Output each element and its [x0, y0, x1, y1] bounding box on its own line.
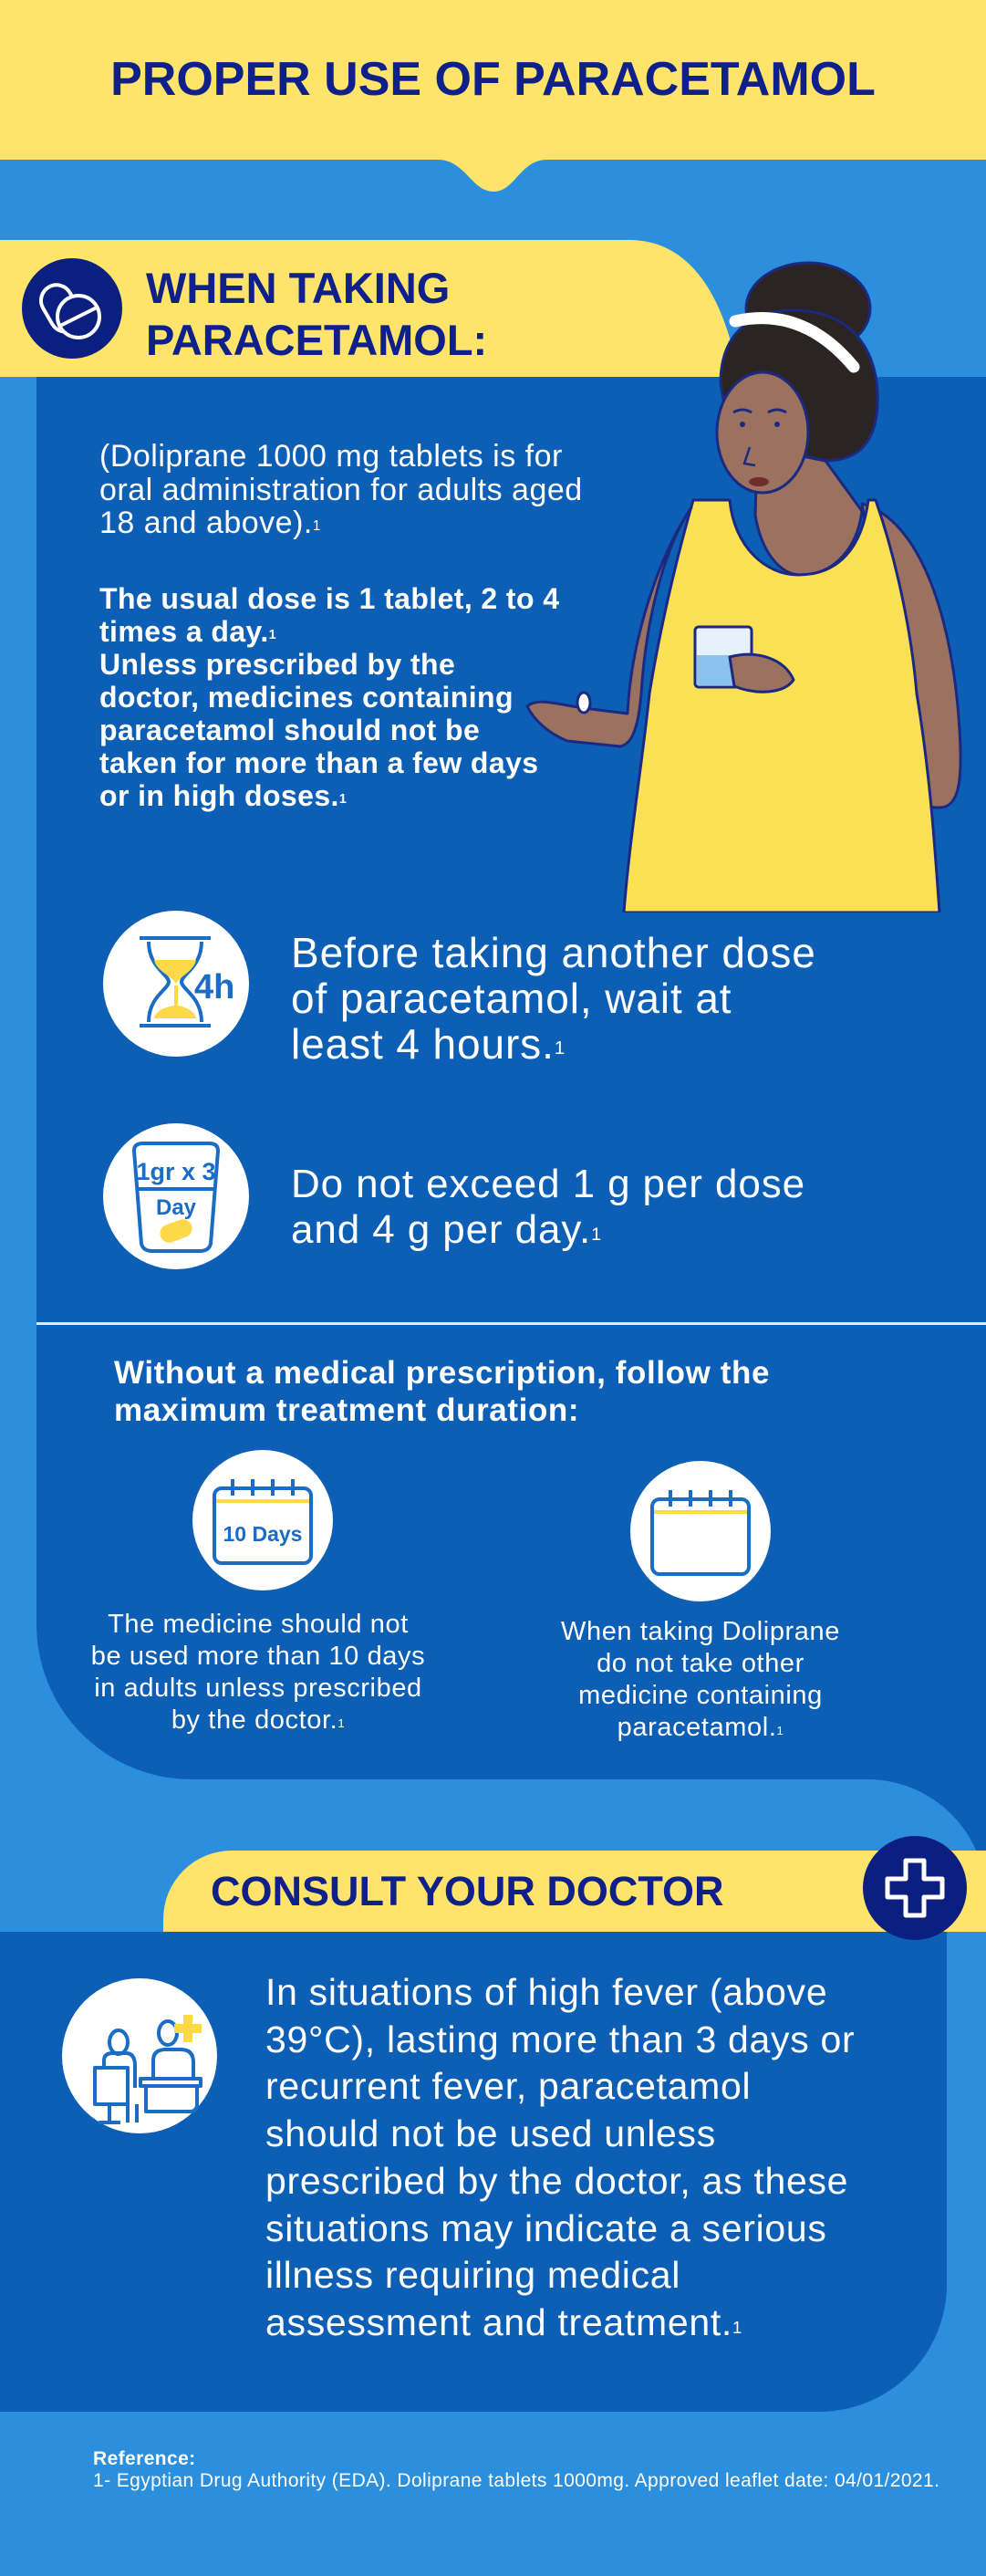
panel: yellow header band consult: [163, 1851, 986, 1932]
text block: do not exceed: [291, 1162, 805, 1252]
text block: usual dose: [99, 582, 559, 812]
icon: empty calendar: [630, 1461, 771, 1601]
text block: usual dose: doctor, medicines containing: [99, 681, 514, 714]
text block: consult body: situations may indicate a serious: [265, 2207, 827, 2249]
icon: doctor consultation: [62, 1978, 217, 2133]
icon: hourglass 4h: 4h: [194, 968, 234, 1006]
text block: 10 days limit: The medicine should not: [108, 1610, 409, 1639]
text block: 10 days limit: in adults unless prescribed: [94, 1674, 422, 1703]
illustration: woman with glass and pill: [525, 261, 962, 913]
icon: calendar 10 days: [192, 1450, 333, 1590]
text block: no other paracetamol: [561, 1617, 840, 1742]
text block: 10 days limit: [91, 1610, 425, 1735]
text block: doliprane intro: oral administration for adults aged: [99, 473, 583, 507]
text block: do not exceed: Do not exceed 1 g per dose: [291, 1162, 805, 1206]
text block: wait 4 hours: least 4 hours.1: [291, 1020, 566, 1068]
text block: doliprane intro: 18 and above).1: [99, 506, 321, 540]
text block: no other paracetamol: do not take other: [597, 1649, 804, 1678]
heading: max treatment duration: Without a medical prescription, follow the: [114, 1355, 770, 1391]
heading: when taking paracetamol: [146, 264, 487, 364]
text block: usual dose: Unless prescribed by the: [99, 648, 455, 681]
text block: 10 days limit: be used more than 10 days: [91, 1642, 425, 1671]
text block: consult body: recurrent fever, paracetamol: [265, 2065, 751, 2107]
panel: dark blue consult panel: [0, 1932, 947, 2412]
heading: max treatment duration: [114, 1355, 770, 1428]
text block: doliprane intro: [99, 439, 583, 540]
panel: yellow header band when taking: [0, 240, 730, 377]
text block: consult body: illness requiring medical: [265, 2254, 680, 2296]
icon: medical cross: [863, 1836, 967, 1940]
text block: usual dose: The usual dose is 1 tablet, 2 to 4: [99, 582, 559, 615]
heading: max treatment duration: maximum treatment duration:: [114, 1392, 579, 1428]
text block: usual dose: paracetamol should not be: [99, 714, 480, 746]
text block: consult body: [265, 1971, 855, 2343]
icon: hourglass 4h: [103, 911, 249, 1057]
icon: cup 1gr x 3 day: 1gr x 3: [136, 1158, 216, 1185]
heading: consult your doctor: CONSULT YOUR DOCTOR: [211, 1868, 724, 1914]
text block: wait 4 hours: of paracetamol, wait at: [291, 975, 732, 1022]
text block: no other paracetamol: medicine containing: [578, 1681, 823, 1710]
icon: cup 1gr x 3 day: [103, 1123, 249, 1269]
text block: consult body: should not be used unless: [265, 2112, 716, 2154]
text block: wait 4 hours: [291, 929, 816, 1068]
text block: usual dose: times a day.1: [99, 615, 276, 648]
text block: wait 4 hours: Before taking another dose: [291, 929, 816, 976]
icon: cup 1gr x 3 day: Day: [156, 1195, 197, 1220]
panel: top yellow title band: [0, 0, 986, 192]
text block: usual dose: taken for more than a few days: [99, 746, 538, 779]
text block: no other paracetamol: paracetamol.1: [618, 1713, 784, 1742]
heading: when taking paracetamol: PARACETAMOL:: [146, 316, 487, 364]
icon: pills: [22, 258, 122, 359]
text block: 10 days limit: by the doctor.1: [171, 1705, 345, 1735]
text block: consult body: In situations of high fever (above: [265, 1971, 827, 2013]
text block: consult body: assessment and treatment.1: [265, 2301, 742, 2343]
text block: usual dose: or in high doses.1: [99, 779, 347, 812]
panel: dark blue main panel: [36, 377, 986, 1779]
text block: doliprane intro: (Doliprane 1000 mg tablets is for: [99, 439, 563, 474]
heading: when taking paracetamol: WHEN TAKING: [146, 264, 450, 312]
icon: calendar 10 days: 10 Days: [223, 1522, 302, 1546]
text block: no other paracetamol: When taking Doliprane: [561, 1617, 840, 1646]
title: PROPER USE OF PARACETAMOL: [110, 53, 876, 106]
panel: lower light blue section: [0, 1779, 986, 2576]
text block: reference: [93, 2448, 939, 2491]
text block: reference: 1- Egyptian Drug Authority (EDA). Doliprane tablets 1000mg. Approved leaflet date: 04/01/2021.: [93, 2470, 939, 2491]
text block: consult body: 39°C), lasting more than 3 days or: [265, 2018, 855, 2060]
text block: reference: Reference:: [93, 2448, 196, 2469]
text block: consult body: prescribed by the doctor, as these: [265, 2160, 848, 2202]
text block: do not exceed: and 4 g per day.1: [291, 1207, 602, 1252]
